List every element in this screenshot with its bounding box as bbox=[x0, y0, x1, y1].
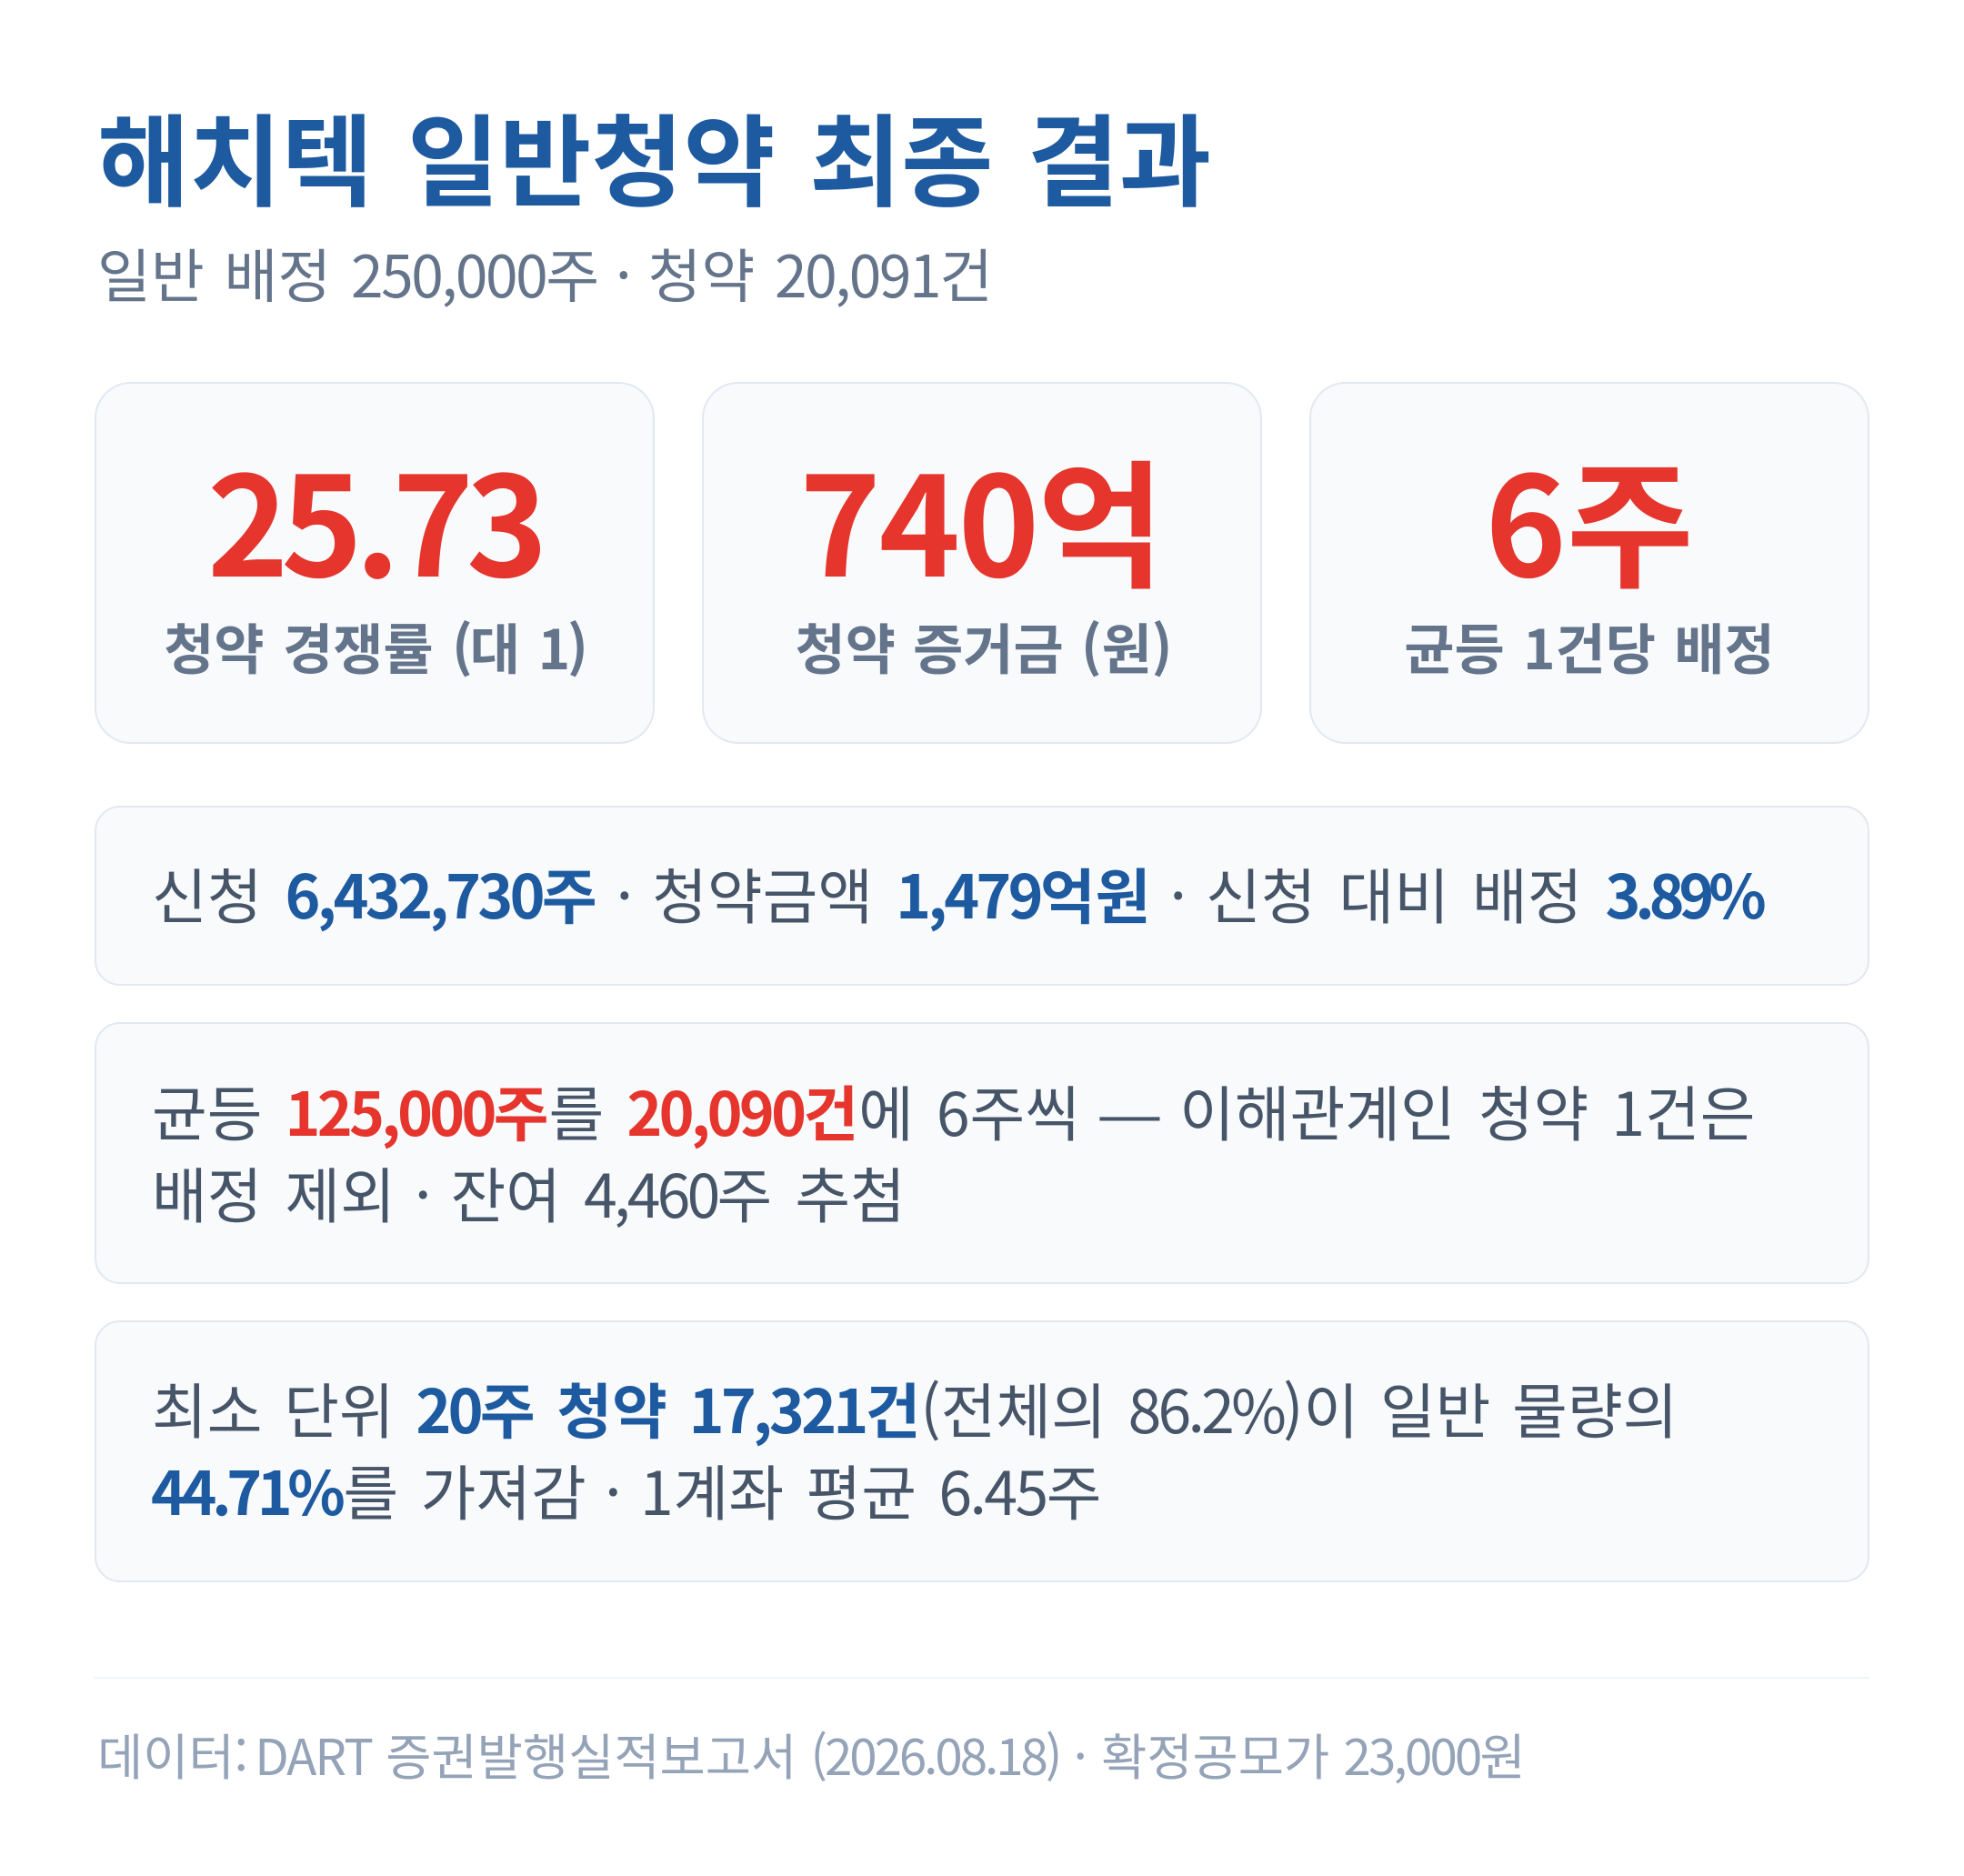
text: equal allocation line 1: 균등 125,000주를 20,090건에 6주씩 이해관계인 청약 1건은 bbox=[152, 1067, 1755, 1154]
text: equal allocation line 2: 배정 제외 · 잔여 4,460주 추첨 bbox=[152, 1149, 906, 1236]
value: competition rate: 25.73 bbox=[207, 416, 540, 617]
label: competition rate: 청약 경쟁률 (대 1) bbox=[164, 607, 586, 686]
footer source: 데이터: DART 증권발행실적보고서 (2026.08.18) · 확정공모가 23,000원 bbox=[97, 1718, 1526, 1790]
label: deposit: 청약 증거금 (원) bbox=[796, 607, 1172, 686]
text: minimum unit line 1: 최소 단위 20주 청약 17,321건(전체의 86.2%)이 일반 물량의 bbox=[152, 1364, 1678, 1451]
panel: subscription summary bbox=[95, 806, 1869, 986]
value: deposit: 740억 bbox=[799, 416, 1165, 617]
label: allocation: 균등 1건당 배정 bbox=[1404, 607, 1775, 686]
panel: equal allocation bbox=[95, 1022, 1869, 1284]
panel: allocation bbox=[1309, 382, 1869, 744]
panel: competition rate bbox=[95, 382, 655, 744]
title: 해치텍 일반청약 최종 결과 bbox=[97, 82, 1211, 227]
panel: minimum unit bbox=[95, 1320, 1869, 1582]
subtitle: 일반 배정 250,000주 · 청약 20,091건 bbox=[97, 231, 993, 315]
text: subscription summary: 신청 6,432,730주 · 청약금액 1,479억원 · 신청 대비 배정 3.89% bbox=[152, 849, 1760, 937]
text: equal allocation line 1: — bbox=[1097, 1067, 1163, 1154]
footer rule bbox=[95, 1677, 1869, 1679]
text: minimum unit line 2: 44.71%를 가져감 · 1계좌 평균 6.45주 bbox=[151, 1446, 1101, 1533]
value: allocation: 6주 bbox=[1485, 416, 1694, 617]
panel: deposit bbox=[702, 382, 1262, 744]
